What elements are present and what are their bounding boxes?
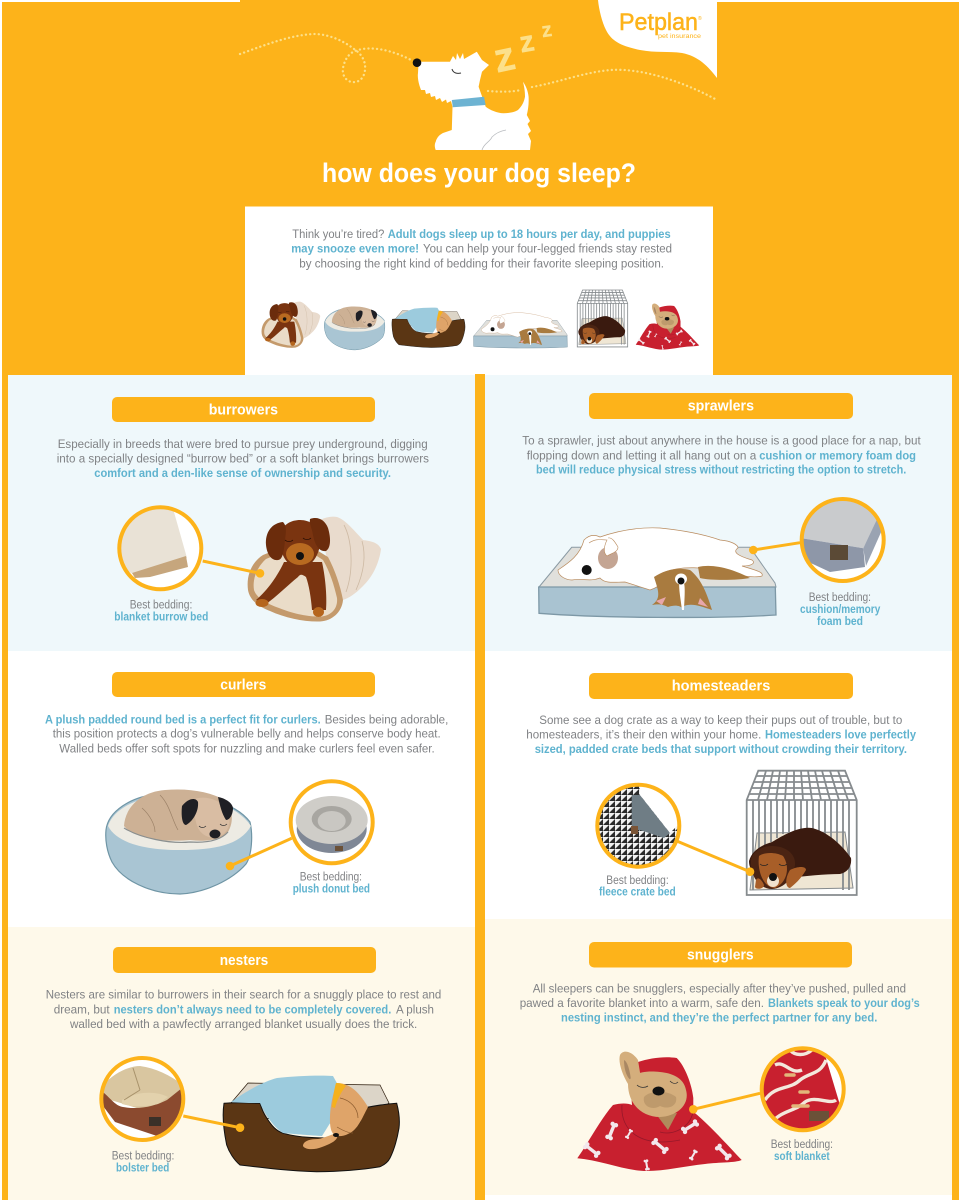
connector: nesters — [183, 1116, 244, 1132]
description: burrowers: comfort and a den-like sense of ownership and security. — [94, 466, 391, 480]
heading: curlers: curlers — [220, 676, 266, 693]
description: snugglers: pawed a favorite blanket into a warm, safe den. — [520, 996, 764, 1010]
bottom strip under snugglers — [485, 1195, 952, 1200]
description: nesters: Nesters are similar to burrowers in their search for a snuggly place to rest and — [46, 988, 441, 1002]
illustration: dog in burrow bed — [248, 517, 381, 622]
description: curlers: Walled beds offer soft spots for nuzzling and make curlers feel even safer. — [59, 741, 435, 755]
label: cushion/memory foam bed: foam bed — [817, 614, 863, 628]
intro text: Adult dogs sleep up to 18 hours per day, and puppies — [388, 227, 671, 241]
label: cushion/memory foam bed: Best bedding: — [809, 590, 871, 604]
label: plush donut bed — [293, 870, 370, 896]
heading: curlers — [112, 672, 375, 697]
description: sprawlers — [522, 434, 921, 477]
panel: nesters — [8, 927, 475, 1200]
illustration: dog wrapped in red blanket — [577, 1052, 742, 1171]
label: plush donut bed: Best bedding: — [300, 870, 362, 884]
description: nesters: dream, but — [54, 1002, 110, 1016]
description: curlers: A plush padded round bed is a perfect fit for curlers. — [45, 712, 321, 726]
label: plush donut bed: plush donut bed — [293, 882, 370, 896]
description: homesteaders: Some see a dog crate as a way to keep their pups out of trouble, but to — [539, 713, 902, 727]
connector: homesteaders — [677, 841, 754, 876]
thumbnail: sprawler — [474, 313, 567, 348]
connector: curlers — [226, 838, 292, 870]
description: burrowers: into a specially designed “burrow bed” or a soft blanket brings burrowers — [57, 452, 429, 466]
panel: burrowers — [8, 375, 475, 651]
label: blanket burrow bed: Best bedding: — [130, 598, 192, 612]
description: sprawlers: flopping down and letting it all hang out on a — [527, 448, 756, 462]
illustration: dog in bolster bed — [223, 1076, 399, 1172]
intro panel — [245, 206, 713, 376]
description: nesters: nesters don’t always need to be completely covered. — [114, 1002, 391, 1016]
description: curlers: this position protects a dog’s vulnerable belly and helps conserve body heat. — [53, 727, 441, 741]
brand ribbon: Petplan logo: ® — [698, 15, 702, 22]
swatch: blanket burrow bed — [115, 505, 201, 589]
brand ribbon: Petplan logo: pet insurance — [658, 33, 701, 40]
center gutter — [475, 374, 485, 1200]
heading: sprawlers: sprawlers — [688, 398, 754, 415]
label: soft blanket: Best bedding: — [771, 1137, 833, 1151]
description: snugglers: Blankets speak to your dog’s — [768, 996, 920, 1010]
heading: snugglers: snugglers — [687, 946, 754, 963]
description: snugglers — [520, 981, 920, 1025]
sleep letters zzz — [493, 23, 553, 79]
label: cushion/memory foam bed — [800, 590, 880, 628]
sleep letters zzz: Z — [493, 43, 517, 79]
thumbnail: burrower — [262, 302, 320, 348]
description: homesteaders: Homesteaders love perfectly — [765, 728, 916, 742]
heading: homesteaders — [589, 673, 853, 699]
connector: snugglers — [689, 1093, 760, 1114]
thumbnail: nester — [392, 308, 465, 348]
thumbnail: homesteader — [577, 290, 628, 347]
intro text: Think you’re tired? — [292, 227, 384, 241]
description: curlers — [45, 712, 448, 755]
description: burrowers — [57, 437, 429, 480]
description: sprawlers: To a sprawler, just about anywhere in the house is a good place for a nap, but — [522, 434, 921, 448]
heading: nesters: nesters — [220, 952, 268, 969]
connector: burrowers — [203, 561, 264, 578]
label: bolster bed — [112, 1148, 174, 1174]
brand ribbon: Petplan logo: Petplan — [619, 9, 698, 36]
intro text: by choosing the right kind of bedding for their favorite sleeping position. — [299, 256, 664, 270]
description: homesteaders: sized, padded crate beds that support without crowding their territory. — [535, 742, 907, 756]
title: how does your dog sleep? — [322, 158, 636, 188]
description: nesters: A plush — [396, 1002, 434, 1016]
label: blanket burrow bed: blanket burrow bed — [114, 610, 208, 624]
description: sprawlers: cushion or memory foam dog — [759, 448, 916, 462]
heading: burrowers — [112, 397, 375, 422]
label: soft blanket — [771, 1137, 833, 1163]
panel: curlers — [8, 651, 475, 927]
label: bolster bed: Best bedding: — [112, 1148, 174, 1162]
description: nesters — [46, 988, 441, 1031]
swatch: plush donut bed — [291, 781, 373, 863]
panel: sprawlers — [485, 375, 952, 651]
description: burrowers: Especially in breeds that were bred to pursue prey underground, digging — [58, 437, 428, 451]
panel: homesteaders — [485, 651, 952, 919]
description: curlers: Besides being adorable, — [325, 712, 448, 726]
description: snugglers: All sleepers can be snugglers, especially after they’ve pushed, pulled and — [533, 981, 906, 995]
intro text: may snooze even more! — [291, 242, 419, 256]
description: homesteaders: homesteaders, it’s their den within your home. — [526, 728, 761, 742]
heading: snugglers — [589, 942, 852, 968]
label: blanket burrow bed — [114, 598, 208, 624]
label: soft blanket: soft blanket — [774, 1149, 830, 1163]
thumbnail: snuggler — [636, 304, 699, 350]
illustration: pug in round bed — [106, 789, 252, 894]
sleep letters zzz: Z — [519, 32, 536, 57]
intro text — [291, 227, 672, 270]
heading: burrowers: burrowers — [209, 401, 278, 418]
heading: homesteaders: homesteaders — [672, 678, 770, 695]
swatch: bolster bed — [101, 1058, 183, 1140]
brand ribbon: Petplan logo — [598, 0, 717, 78]
sleep letters zzz: Z — [541, 23, 553, 41]
description: sprawlers: bed will reduce physical stress without restricting the option to stretch. — [536, 463, 906, 477]
dotted scent trail — [240, 34, 717, 100]
label: fleece crate bed: fleece crate bed — [599, 885, 676, 899]
heading: sprawlers — [589, 393, 853, 419]
description: snugglers: nesting instinct, and they’re the perfect partner for any bed. — [561, 1011, 877, 1025]
intro text: You can help your four-legged friends stay rested — [423, 242, 672, 256]
connector: sprawlers — [749, 543, 800, 554]
illustration: dogs sprawled on foam bed — [539, 528, 776, 617]
heading: nesters — [113, 947, 376, 973]
label: fleece crate bed: Best bedding: — [606, 873, 669, 887]
label: bolster bed: bolster bed — [116, 1160, 169, 1174]
thumbnail: curler — [324, 307, 385, 350]
description: homesteaders — [526, 713, 916, 756]
swatch: fleece crate bed — [597, 780, 683, 867]
illustration: dog in wire crate — [747, 771, 857, 895]
label: cushion/memory foam bed: cushion/memory — [800, 602, 880, 616]
swatch: soft blanket — [760, 1045, 844, 1132]
panel: snugglers — [485, 919, 952, 1195]
description: nesters: walled bed with a pawfectly arranged blanket usually does the trick. — [69, 1017, 417, 1031]
sleeping white dog — [413, 52, 531, 150]
label: fleece crate bed — [599, 873, 676, 899]
swatch: cushion/memory foam bed — [798, 495, 885, 581]
